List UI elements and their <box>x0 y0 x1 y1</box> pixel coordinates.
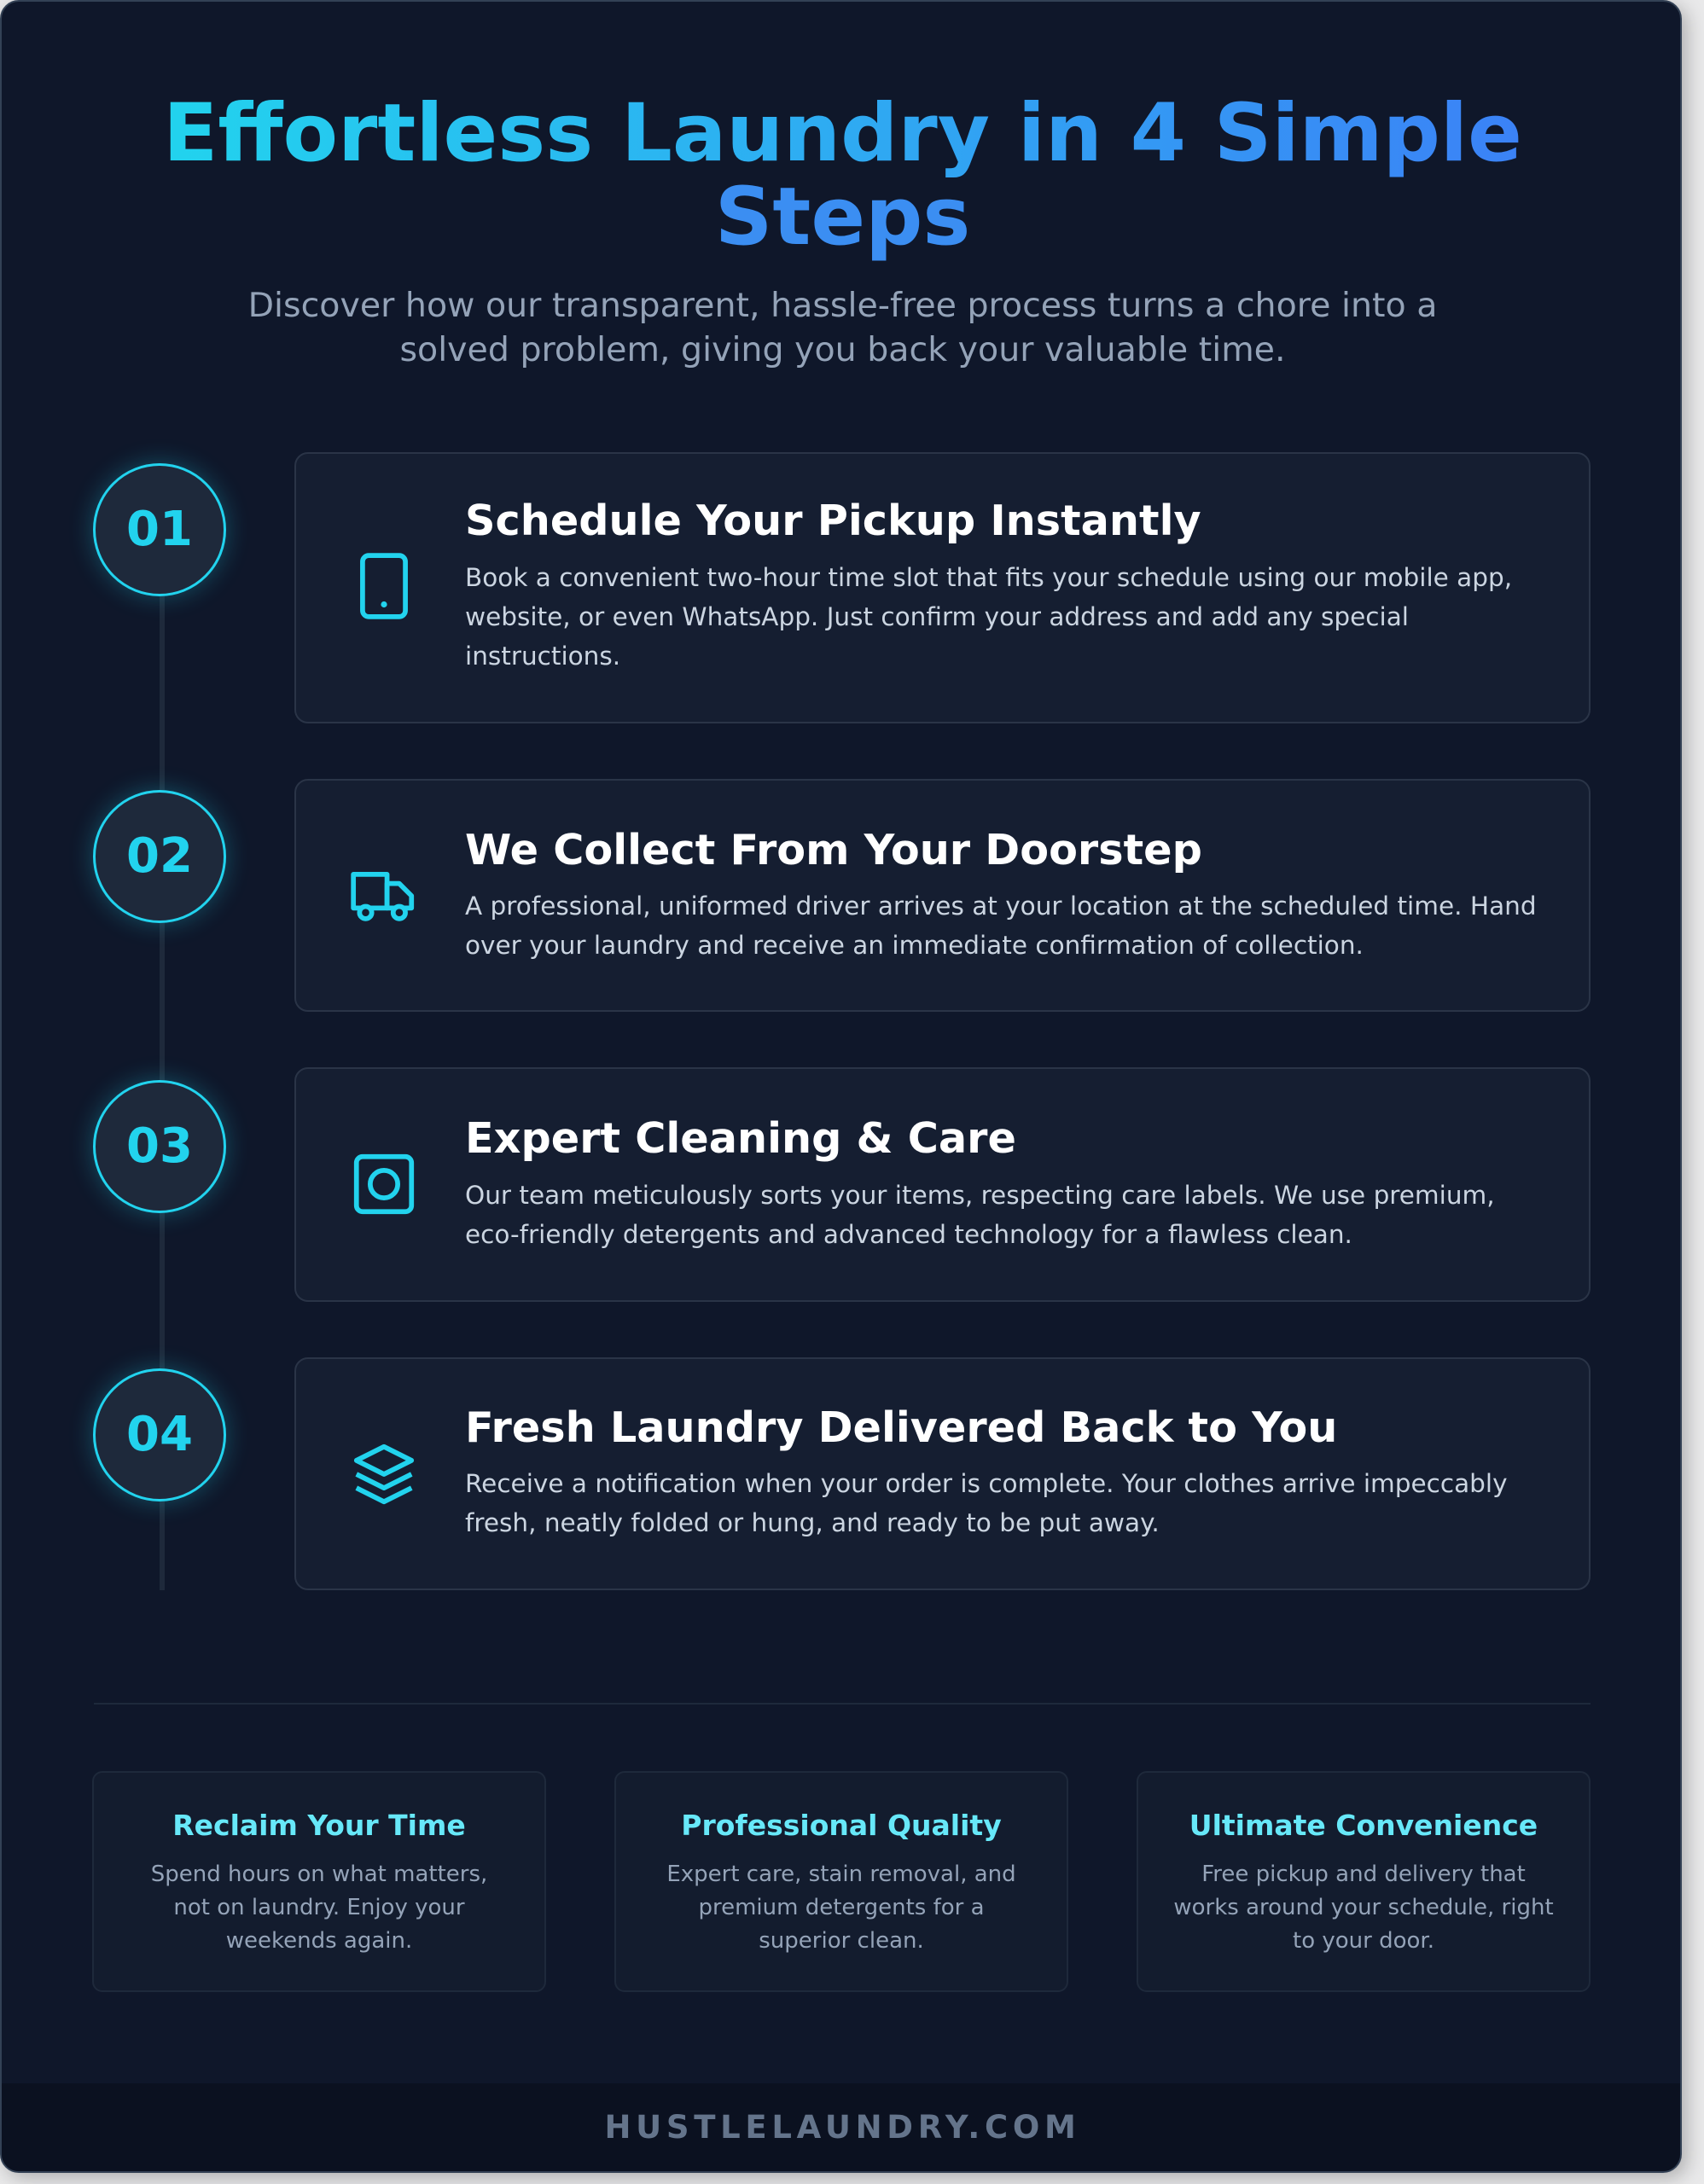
step circle 04: 04 <box>126 1407 193 1462</box>
icon: truck <box>351 872 415 921</box>
step circle 01: 01 <box>126 502 193 557</box>
text: fresh, neatly folded or hung, and ready to be put away. <box>465 1508 1160 1537</box>
heading: We Collect From Your Doorstep <box>465 825 1202 874</box>
subtitle: solved problem, giving you back your valuable time. <box>399 330 1286 369</box>
text <box>465 892 1537 960</box>
panel: benefit quality: Professional Quality <box>681 1809 1002 1842</box>
text: Our team meticulously sorts your items, respecting care labels. We use premium, <box>465 1181 1495 1210</box>
footer <box>2 2083 1684 2177</box>
panel: benefit convenience: works around your schedule, right <box>1173 1895 1554 1920</box>
text: website, or even WhatsApp. Just confirm your address and add any special <box>465 602 1409 631</box>
title: Steps <box>715 171 970 264</box>
panel: benefit quality: superior clean. <box>759 1928 924 1954</box>
panel: benefit convenience: to your door. <box>1293 1928 1434 1954</box>
step circle 03: 03 <box>126 1118 193 1174</box>
panel: step 3 <box>294 1067 1591 1302</box>
heading: Fresh Laundry Delivered Back to You <box>465 1403 1337 1452</box>
panel: benefit time: not on laundry. Enjoy your <box>173 1895 465 1920</box>
subtitle <box>248 286 1437 369</box>
text: Book a convenient two-hour time slot that fits your schedule using our mobile app, <box>465 563 1512 592</box>
icon: layers <box>353 1443 415 1505</box>
text: Receive a notification when your order is complete. Your clothes arrive impeccably <box>465 1469 1508 1498</box>
icon: washing machine <box>353 1153 415 1215</box>
panel: benefit quality: premium detergents for a <box>698 1895 985 1920</box>
panel: benefit convenience <box>1137 1771 1591 1992</box>
step circle 03 <box>93 1080 226 1213</box>
panel: benefit time: Reclaim Your Time <box>172 1809 466 1842</box>
step circle 01 <box>93 463 226 596</box>
heading: Expert Cleaning & Care <box>465 1113 1016 1163</box>
panel: step 1 <box>294 452 1591 723</box>
panel: benefit time: weekends again. <box>226 1928 412 1954</box>
step circle 02: 02 <box>126 828 193 884</box>
panel: benefit convenience: Free pickup and delivery that <box>1201 1862 1526 1887</box>
text: instructions. <box>465 642 620 671</box>
panel: step 4 <box>294 1357 1591 1590</box>
panel: benefit time <box>92 1771 546 1992</box>
step circle 02 <box>93 790 226 923</box>
text: A professional, uniformed driver arrives at your location at the scheduled time. Hand <box>465 892 1537 921</box>
icon: phone <box>360 553 408 619</box>
footer: HUSTLELAUNDRY.COM <box>604 2109 1081 2146</box>
timeline line <box>160 529 165 1590</box>
subtitle: Discover how our transparent, hassle-free process turns a chore into a <box>248 286 1437 325</box>
title <box>163 87 1522 264</box>
panel: benefit quality <box>614 1771 1068 1992</box>
title: Effortless Laundry in 4 Simple <box>163 87 1522 180</box>
text <box>465 1181 1495 1249</box>
panel: benefit quality: Expert care, stain removal, and <box>666 1862 1016 1887</box>
panel: step 2 <box>294 779 1591 1012</box>
step circle 04 <box>93 1368 226 1502</box>
panel: benefit convenience: Ultimate Convenience <box>1189 1809 1538 1842</box>
heading: Schedule Your Pickup Instantly <box>465 496 1201 545</box>
text <box>465 563 1512 671</box>
text: eco-friendly detergents and advanced technology for a flawless clean. <box>465 1220 1352 1249</box>
text: over your laundry and receive an immediate confirmation of collection. <box>465 931 1364 960</box>
text <box>465 1469 1508 1537</box>
panel: benefit time: Spend hours on what matters, <box>151 1862 487 1887</box>
